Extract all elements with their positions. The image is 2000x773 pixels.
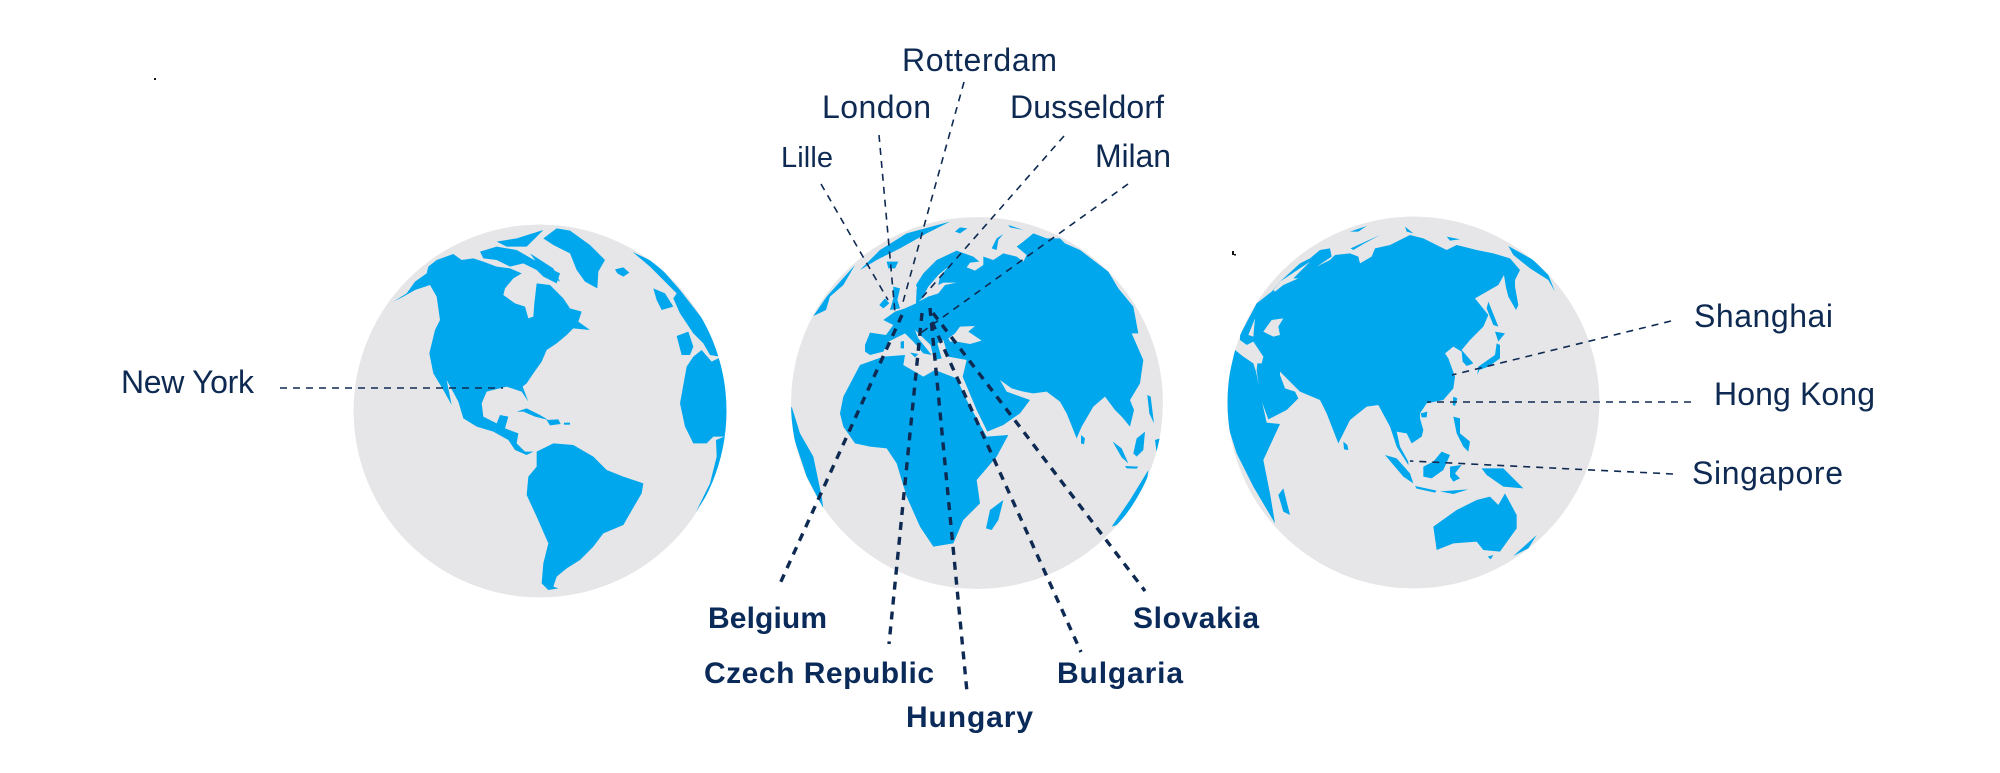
New Zealand [1513, 535, 1537, 556]
Africa [1225, 350, 1280, 523]
Black Sea [1263, 318, 1283, 337]
Eurasia [1240, 235, 1520, 465]
Japan [1477, 343, 1500, 375]
speck marks [154, 78, 1236, 256]
label: Slovakia: Slovakia [1133, 602, 1259, 635]
Iceland [615, 267, 629, 277]
Mediterranean islands [910, 353, 918, 357]
connector: Dusseldorf [920, 136, 1064, 300]
Alaska [1508, 246, 1555, 292]
label: New York: New York [121, 364, 255, 400]
label: Hong Kong: Hong Kong [1714, 376, 1875, 412]
label: Singapore: Singapore [1692, 455, 1843, 491]
Borneo [1423, 452, 1450, 478]
Iceland [887, 262, 898, 268]
globe: Asia and Oceania [1225, 216, 1600, 588]
Adriatic [1248, 318, 1255, 337]
label: London: London [822, 89, 931, 125]
connector: Shanghai [1452, 321, 1671, 375]
Australia on the limb [1112, 470, 1148, 527]
New Guinea [1482, 468, 1523, 488]
connector: Lille [821, 184, 888, 300]
connector: New York [280, 387, 503, 389]
Philippines [1453, 417, 1470, 452]
Borneo [1133, 432, 1145, 457]
label: Bulgaria: Bulgaria [1057, 657, 1183, 690]
Sri Lanka [1343, 442, 1348, 450]
label: Rotterdam: Rotterdam [902, 42, 1057, 78]
Sumatra [1385, 455, 1413, 483]
Novaya Zemlya [992, 234, 1003, 250]
Greenland [860, 222, 950, 270]
South America [527, 443, 643, 590]
label: Dusseldorf: Dusseldorf [1010, 89, 1164, 125]
Greenland [543, 228, 605, 288]
connector: Hong Kong [1427, 401, 1691, 403]
Sakhalin [1487, 302, 1498, 327]
label: Hungary: Hungary [906, 701, 1033, 734]
label: Lille: Lille [781, 142, 833, 174]
Mediterranean [1246, 342, 1264, 364]
Arctic islands [1350, 226, 1367, 232]
label: Belgium: Belgium [708, 602, 827, 635]
Africa [840, 355, 1008, 547]
connector: Bulgaria [932, 322, 1081, 652]
connector: London [879, 135, 895, 313]
Sumatra [1113, 442, 1128, 463]
Australia [1433, 493, 1517, 552]
North America [393, 254, 590, 455]
South America on the limb [788, 407, 823, 508]
Ireland [879, 298, 889, 308]
Java [1125, 466, 1138, 469]
label: Milan: Milan [1095, 138, 1171, 174]
connector: Singapore [1410, 461, 1673, 474]
Taiwan and Hainan [1453, 397, 1457, 406]
globe: Americas [354, 224, 728, 598]
connector: Belgium [778, 315, 902, 588]
Svalbard [955, 227, 967, 233]
Sulawesi [1450, 465, 1462, 482]
Caribbean islands [517, 408, 548, 420]
Africa on the limb [680, 350, 728, 443]
Arctic islands [480, 247, 560, 283]
United Kingdom [890, 287, 900, 310]
Arctic Canada [813, 265, 855, 316]
connector: Milan [918, 184, 1128, 335]
connector: Hungary [930, 308, 967, 692]
label: Czech Republic: Czech Republic [704, 657, 934, 690]
Sri Lanka [1081, 435, 1085, 444]
label: Shanghai: Shanghai [1694, 298, 1833, 334]
Madagascar [986, 500, 1003, 530]
Black Sea [948, 326, 982, 344]
Java [1415, 486, 1437, 493]
Madagascar [1278, 488, 1290, 515]
globe: Europe, Africa and Asia [788, 217, 1163, 589]
connector: Rotterdam [903, 82, 964, 302]
Japan and Philippines on the limb [1147, 395, 1154, 423]
Eurasia [865, 233, 1143, 438]
White Sea inlet [1273, 262, 1310, 292]
Tasmania [1488, 555, 1493, 559]
connector: Czech Republic [889, 313, 922, 644]
Europe on the limb [633, 252, 720, 357]
connector: Slovakia [933, 313, 1145, 591]
